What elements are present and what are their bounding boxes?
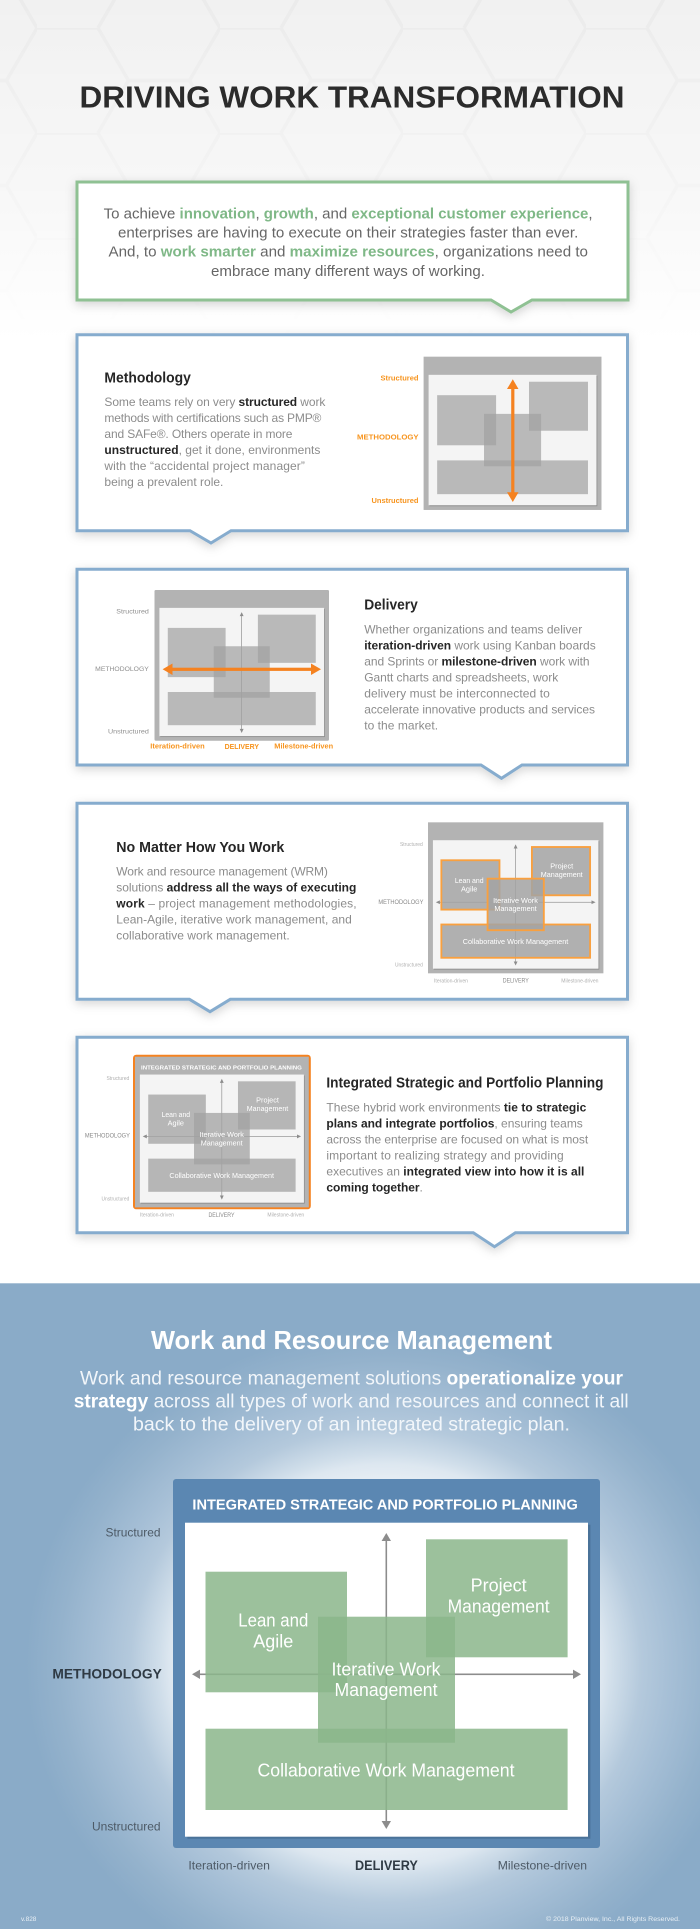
diagram: four ways of working: Management [494, 904, 537, 913]
integrated planning body text: executives an integrated view into how it is all [326, 1164, 584, 1178]
axis labels: four ways diagram: Milestone-driven [561, 979, 598, 985]
axis labels: integrated diagram: DELIVERY [208, 1212, 234, 1219]
panel: work and resource management [0, 1283, 700, 1929]
axis labels: four ways diagram: Iteration-driven [434, 979, 468, 985]
axis labels: delivery diagram: Unstructured [108, 728, 149, 735]
delivery body text: and Sprints or milestone-driven work with [364, 654, 590, 668]
panel box [77, 1037, 628, 1247]
panel: intro callout [77, 182, 628, 312]
axis label: unstructured: Unstructured [372, 498, 418, 505]
axis labels: four ways diagram: Structured [400, 842, 423, 848]
axis labels: four ways diagram [378, 842, 598, 985]
heading: integrated planning: Integrated Strategic and Portfolio Planning [326, 1075, 603, 1091]
diagram: four ways of working: Management [541, 870, 583, 879]
panel: no matter how you work [77, 803, 628, 1012]
intro text: To achieve innovation, growth, and exceptional customer experience, [104, 205, 593, 222]
section intro text: strategy across all types of work and resources and connect it all [74, 1390, 629, 1412]
orange frame [134, 1056, 310, 1208]
block: project management: Management [448, 1596, 550, 1616]
methodology body text: methods with certifications such as PMP® [104, 411, 322, 425]
diagram: integrated planning: Management [201, 1138, 243, 1147]
no matter body text: collaborative work management. [116, 928, 290, 942]
delivery body text: Whether organizations and teams deliver [364, 622, 582, 636]
methodology body text: Some teams rely on very structured work [104, 395, 326, 409]
axis labels: delivery diagram: METHODOLOGY [95, 666, 149, 673]
block: project management: Project [471, 1576, 527, 1596]
methodology body text [103, 395, 326, 489]
section intro text: Work and resource management solutions operationalize your [80, 1367, 623, 1389]
no matter body text [115, 864, 357, 942]
block: iterative work management [318, 1617, 455, 1743]
methodology body text: and SAFe®. Others operate in more [104, 427, 293, 441]
arrow: methodology vertical [507, 379, 518, 502]
heading: no matter how you work: No Matter How You Work [116, 840, 285, 856]
axis labels: four ways diagram: METHODOLOGY [378, 899, 423, 906]
diagram frame [173, 1479, 600, 1848]
axis labels: integrated diagram: METHODOLOGY [85, 1133, 130, 1140]
no matter body text: Lean-Agile, iterative work management, and [116, 912, 352, 926]
diagram: four ways of working: Agile [461, 884, 477, 893]
axis labels: delivery diagram [95, 608, 333, 751]
block: collaborative work management: Collaborative Work Management [258, 1761, 514, 1781]
block: lean and agile: Agile [253, 1632, 293, 1652]
callout box [77, 182, 628, 312]
heading: delivery: Delivery [364, 597, 418, 613]
block: lean and agile [206, 1572, 347, 1692]
block: iterative work management: Iterative Work [332, 1660, 441, 1680]
intro text: embrace many different ways of working. [211, 263, 485, 280]
diagram: integrated planning: Agile [168, 1119, 184, 1128]
block: project management [426, 1539, 568, 1657]
block: collaborative work management [206, 1729, 568, 1810]
diagram plot area [185, 1523, 590, 1839]
axis labels: integrated diagram: Iteration-driven [140, 1213, 174, 1219]
integrated planning body text [326, 1100, 589, 1194]
methodology body text: unstructured, get it done, environments [104, 443, 320, 457]
delivery body text: to the market. [364, 718, 438, 732]
delivery body text: accelerate innovative products and services [364, 702, 595, 716]
delivery body text: delivery must be interconnected to [364, 686, 550, 700]
diagram: four ways of working: Collaborative Work Management [463, 937, 568, 946]
panel: delivery [77, 569, 628, 778]
axis labels: integrated diagram: Unstructured [102, 1196, 129, 1202]
diagram: integrated planning: Lean and [162, 1110, 190, 1119]
delivery body text: Gantt charts and spreadsheets, work [364, 670, 559, 684]
integrated planning body text: coming together. [326, 1180, 423, 1194]
version note: v.828 [21, 1916, 37, 1923]
label: iteration-driven: Iteration-driven [188, 1858, 270, 1872]
diagram: integrated planning [85, 1056, 310, 1219]
arrow: vertical axis [382, 1533, 391, 1829]
integrated planning body text: plans and integrate portfolios, ensuring teams [326, 1116, 583, 1130]
title: DRIVING WORK TRANSFORMATION [80, 80, 624, 114]
panel box [77, 803, 628, 1012]
diagram: four ways of working: Lean and [455, 876, 484, 885]
axis labels: four ways diagram: DELIVERY [503, 978, 529, 985]
delivery body text: iteration-driven work using Kanban boards [364, 638, 596, 652]
axis labels: integrated diagram [85, 1076, 304, 1219]
section intro text: back to the delivery of an integrated strategic plan. [133, 1414, 570, 1436]
diagram: four ways of working [378, 822, 603, 985]
no matter body text: work – project management methodologies, [115, 896, 357, 910]
panel box [77, 569, 628, 778]
diagram: four ways of working: Iterative Work [493, 896, 538, 905]
panel: integrated strategic and portfolio planning [77, 1037, 628, 1247]
axis labels: delivery diagram: DELIVERY [225, 744, 259, 751]
panel: methodology [77, 335, 628, 543]
intro text: And, to work smarter and maximize resources, organizations need to [108, 244, 588, 261]
axis labels: integrated diagram: Milestone-driven [267, 1213, 304, 1219]
diagram: methodology axis [357, 357, 601, 510]
methodology body text: being a prevalent role. [104, 475, 223, 489]
axis labels: four ways diagram: Unstructured [395, 963, 423, 969]
section intro text [74, 1367, 629, 1436]
label: milestone-driven: Milestone-driven [498, 1858, 587, 1872]
no matter body text: Work and resource management (WRM) [116, 864, 328, 878]
diagram: delivery axis [95, 590, 333, 751]
integrated planning body text: important to realizing strategy and providing [326, 1148, 564, 1162]
intro text: enterprises are having to execute on their strategies faster than ever. [118, 224, 578, 241]
block: iterative work management: Management [334, 1680, 438, 1700]
diagram: integrated planning: Management [247, 1104, 288, 1113]
integrated planning body text: These hybrid work environments tie to strategic [326, 1100, 587, 1114]
axis labels: delivery diagram: Iteration-driven [150, 743, 205, 750]
methodology body text: with the “accidental project manager” [103, 459, 305, 473]
label: structured: Structured [106, 1526, 160, 1540]
diagram: integrated planning: Iterative Work [200, 1130, 244, 1139]
label: methodology: METHODOLOGY [52, 1666, 162, 1681]
section heading: Work and Resource Management [151, 1325, 552, 1355]
label: delivery: DELIVERY [355, 1858, 418, 1873]
block: lean and agile: Lean and [238, 1611, 308, 1631]
arrow: horizontal axis [192, 1670, 581, 1679]
delivery body text [364, 622, 596, 732]
diagram: integrated planning: Project [256, 1096, 279, 1105]
axis labels: delivery diagram: Milestone-driven [274, 743, 333, 750]
integrated planning body text: across the enterprise are focused on what is most [326, 1132, 589, 1146]
blue background [0, 1283, 700, 1929]
heading: methodology: Methodology [104, 371, 191, 387]
main diagram [52, 1479, 600, 1873]
no matter body text: solutions address all the ways of executing [116, 880, 356, 894]
diagram: integrated planning: Collaborative Work Management [169, 1171, 274, 1180]
arrow: delivery horizontal [163, 664, 321, 675]
diagram header: INTEGRATED STRATEGIC AND PORTFOLIO PLANNING [192, 1497, 578, 1513]
axis labels: integrated diagram: Structured [106, 1076, 129, 1082]
diagram: four ways of working: Project [550, 861, 573, 870]
panel box [77, 335, 628, 543]
copyright note: © 2018 Planview, Inc., All Rights Reserved. [546, 1915, 680, 1923]
intro text [104, 205, 593, 280]
axis label: methodology: METHODOLOGY [357, 434, 419, 441]
label: unstructured: Unstructured [92, 1820, 161, 1834]
diagram header: INTEGRATED STRATEGIC AND PORTFOLIO PLANNING [141, 1065, 302, 1071]
axis label: structured: Structured [380, 376, 418, 383]
axis labels: delivery diagram: Structured [116, 608, 149, 615]
